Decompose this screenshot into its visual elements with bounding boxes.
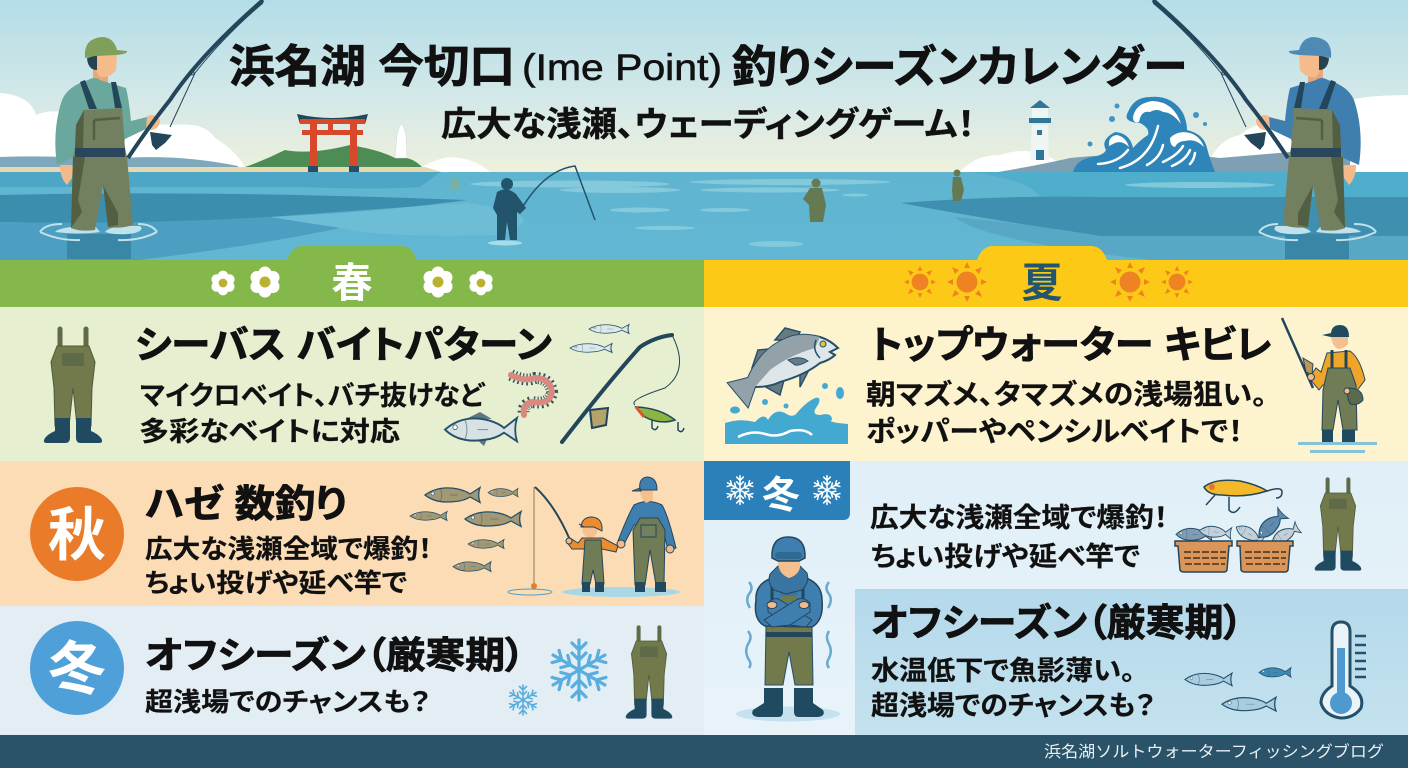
clouds left <box>0 93 245 167</box>
water <box>0 172 1408 260</box>
title: (Ime Point) <box>522 47 722 88</box>
body text: 朝マズメ、タマズメの浅場狙い。 <box>866 378 1267 410</box>
badge: autumn: 秋 <box>48 503 106 568</box>
icon: fish baskets <box>1175 508 1301 572</box>
body text: 超浅場でのチャンスも？ <box>145 687 430 717</box>
lighthouse right <box>1029 100 1051 160</box>
heading: シーバス バイトパターン <box>135 325 552 367</box>
icon: lure <box>636 407 684 432</box>
olive wader silhouettes <box>803 170 964 222</box>
spring header band <box>0 246 704 307</box>
panel: spring sea bass <box>0 307 704 461</box>
panel: winter right <box>704 461 1408 735</box>
icon: waders <box>626 627 672 719</box>
body text <box>139 381 486 447</box>
icon: yellow lure <box>1204 480 1282 512</box>
badge: autumn <box>30 487 124 581</box>
body text: 超浅場でのチャンスも？ <box>871 691 1155 721</box>
spring kanji: 春 <box>332 260 372 306</box>
icon: summer angler <box>1282 318 1377 453</box>
panel: winter off season left <box>0 606 704 735</box>
body text: マイクロベイト、バチ抜けなど <box>140 381 486 411</box>
cloud near island <box>415 157 490 172</box>
icon: freezing angler <box>736 537 840 722</box>
far wader silhouette faint <box>450 177 460 190</box>
icon: large snowflake <box>550 640 608 700</box>
small white lighthouse <box>395 125 407 158</box>
badge: winter: 冬 <box>48 637 106 702</box>
icon: small snowflake <box>508 685 538 715</box>
headland right <box>998 150 1350 172</box>
icon: waders <box>1315 479 1361 571</box>
body text <box>870 503 1168 572</box>
icon: small baitfish <box>570 324 629 352</box>
heading: オフシーズン（厳寒期） <box>145 635 525 676</box>
badge: winter <box>30 621 124 715</box>
father <box>617 477 676 592</box>
body text <box>145 534 432 598</box>
heading: トップウォーター キビレ <box>870 325 1272 367</box>
subtitle: 広大な浅瀬、ウェーディングゲーム！ <box>441 105 975 144</box>
panel: summer top water <box>704 307 1408 461</box>
body text: ポッパーやペンシルベイトで！ <box>866 416 1243 447</box>
body text: ちょい投げや延べ竿で <box>871 542 1140 572</box>
angler left <box>40 0 263 259</box>
clouds right <box>960 95 1408 172</box>
wave <box>1073 97 1215 172</box>
footer credit: 浜名湖ソルトウォーターフィッシングブログ <box>1044 742 1384 761</box>
heading: ハゼ 数釣り <box>145 484 347 526</box>
panel: off season right <box>855 589 1408 735</box>
flowers <box>211 266 493 298</box>
wader silhouette centre <box>488 166 595 246</box>
title: 釣りシーズンカレンダー <box>732 43 1187 92</box>
panel: autumn goby <box>0 461 704 606</box>
badge: winter tab <box>704 461 850 520</box>
icon: father and child fishing <box>508 477 680 597</box>
body text: 多彩なベイトに対応 <box>139 417 400 447</box>
title: 浜名湖 今切口 <box>229 41 515 92</box>
body text: 広大な浅瀬全域で爆釣！ <box>145 534 432 564</box>
icon: fish <box>1185 668 1291 711</box>
worm body <box>511 375 552 415</box>
footer bar <box>0 735 1408 768</box>
badge: winter tab: 冬 <box>762 475 800 517</box>
icon: worm <box>511 375 552 415</box>
suns <box>904 262 1193 302</box>
body text: 水温低下で魚影薄い。 <box>871 656 1135 686</box>
island with small lighthouse <box>245 145 422 167</box>
summer kanji: 夏 <box>1022 260 1062 306</box>
body text: 広大な浅瀬全域で爆釣！ <box>870 503 1168 533</box>
summer header band <box>704 246 1408 307</box>
title <box>229 41 1187 92</box>
body text <box>866 378 1267 447</box>
child <box>566 517 618 592</box>
icon: sea bass <box>445 412 517 446</box>
body text <box>871 656 1155 721</box>
icon: gobies <box>410 488 521 572</box>
icon: jumping fish and splash <box>725 328 848 444</box>
icon: waders <box>44 329 102 443</box>
body text: ちょい投げや延べ竿で <box>145 568 407 598</box>
hero scene background <box>0 0 1408 260</box>
distant hills <box>0 156 238 168</box>
icon: thermometer <box>1321 622 1366 718</box>
torii gate <box>297 114 368 172</box>
heading: オフシーズン（厳寒期） <box>871 602 1243 645</box>
sand strip <box>0 167 442 172</box>
angler right <box>1153 0 1376 259</box>
icon: rod and reel <box>562 335 680 442</box>
